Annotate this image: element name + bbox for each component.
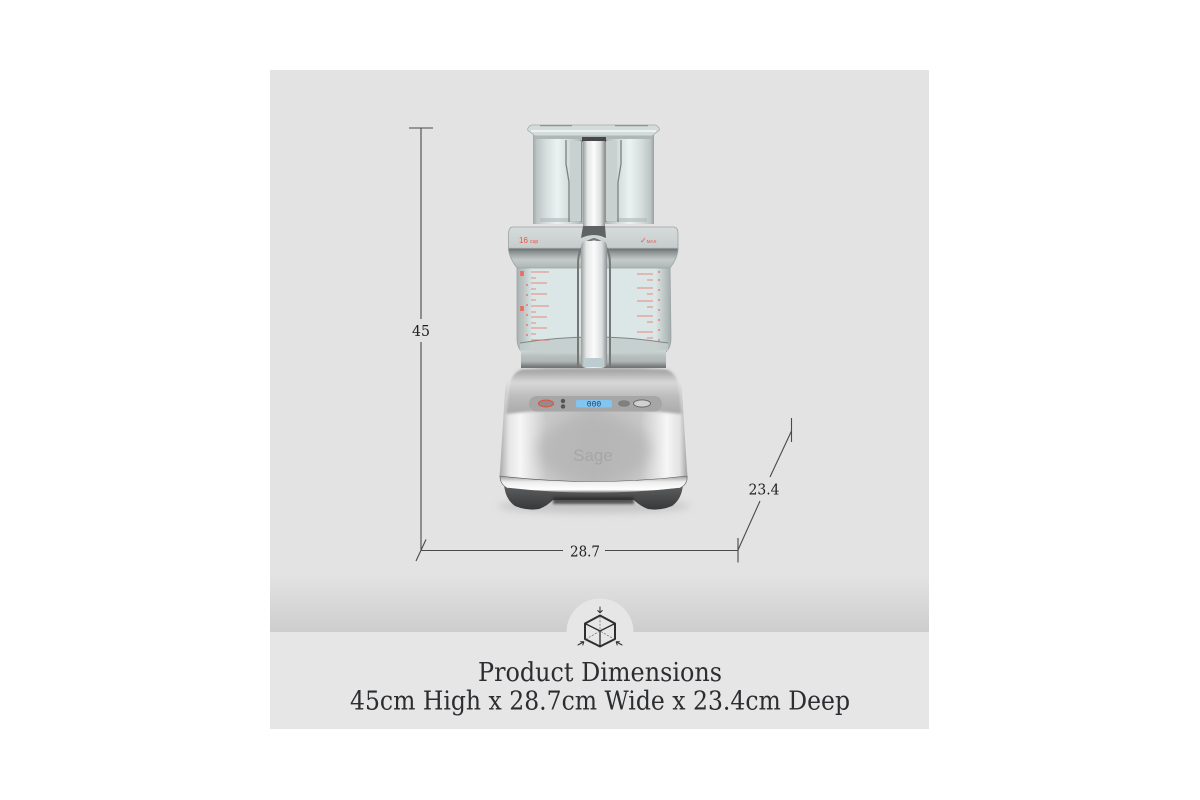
- food pusher: [582, 137, 606, 226]
- dimension: width 28.7: 28.7: [570, 544, 600, 560]
- bowl measurement markings right: [637, 272, 660, 340]
- collar labels: ✓MAX: [640, 236, 656, 245]
- lcd display: [576, 400, 612, 408]
- heading: product dimensions: Product Dimensions: [478, 658, 722, 688]
- icon: cube with inward arrows: [578, 607, 622, 646]
- bowl inner floor curve: [520, 337, 668, 354]
- control panel: 000: [587, 401, 601, 410]
- lid: [528, 125, 660, 139]
- control panel: [529, 396, 662, 412]
- collar labels: 16 cup: [519, 236, 538, 245]
- collar labels: [519, 236, 656, 245]
- brushed centre: [538, 416, 650, 484]
- panel: shaded gradient band: [270, 575, 929, 632]
- feed chute: [533, 134, 654, 224]
- brand logo: Sage: [573, 446, 613, 465]
- dimension: height 45: 45: [412, 324, 430, 340]
- silver trim band: [500, 476, 687, 493]
- panel: caption area: [270, 632, 929, 729]
- icon tab: semicircle behind cube: [566, 598, 634, 666]
- bowl lower ring: [521, 350, 666, 369]
- bowl body: [517, 262, 671, 354]
- panel: grey background: [270, 70, 929, 729]
- product: food processor: [498, 125, 690, 513]
- handle: [578, 226, 610, 368]
- underside shadow: [553, 497, 634, 504]
- dimension: depth 23.4: [738, 418, 792, 550]
- dimension: depth 23.4: 23.4: [748, 482, 780, 498]
- dimension: width 28.7: [416, 538, 738, 562]
- motor base: [500, 368, 687, 510]
- bowl top collar: [508, 227, 678, 268]
- text: measurements summary: 45cm High x 28.7cm Wide x 23.4cm Deep: [350, 686, 850, 716]
- base upper shading: [506, 369, 682, 414]
- ground shadow: [498, 499, 690, 513]
- dark feet: [504, 484, 683, 510]
- bowl measurement markings left: [522, 271, 549, 340]
